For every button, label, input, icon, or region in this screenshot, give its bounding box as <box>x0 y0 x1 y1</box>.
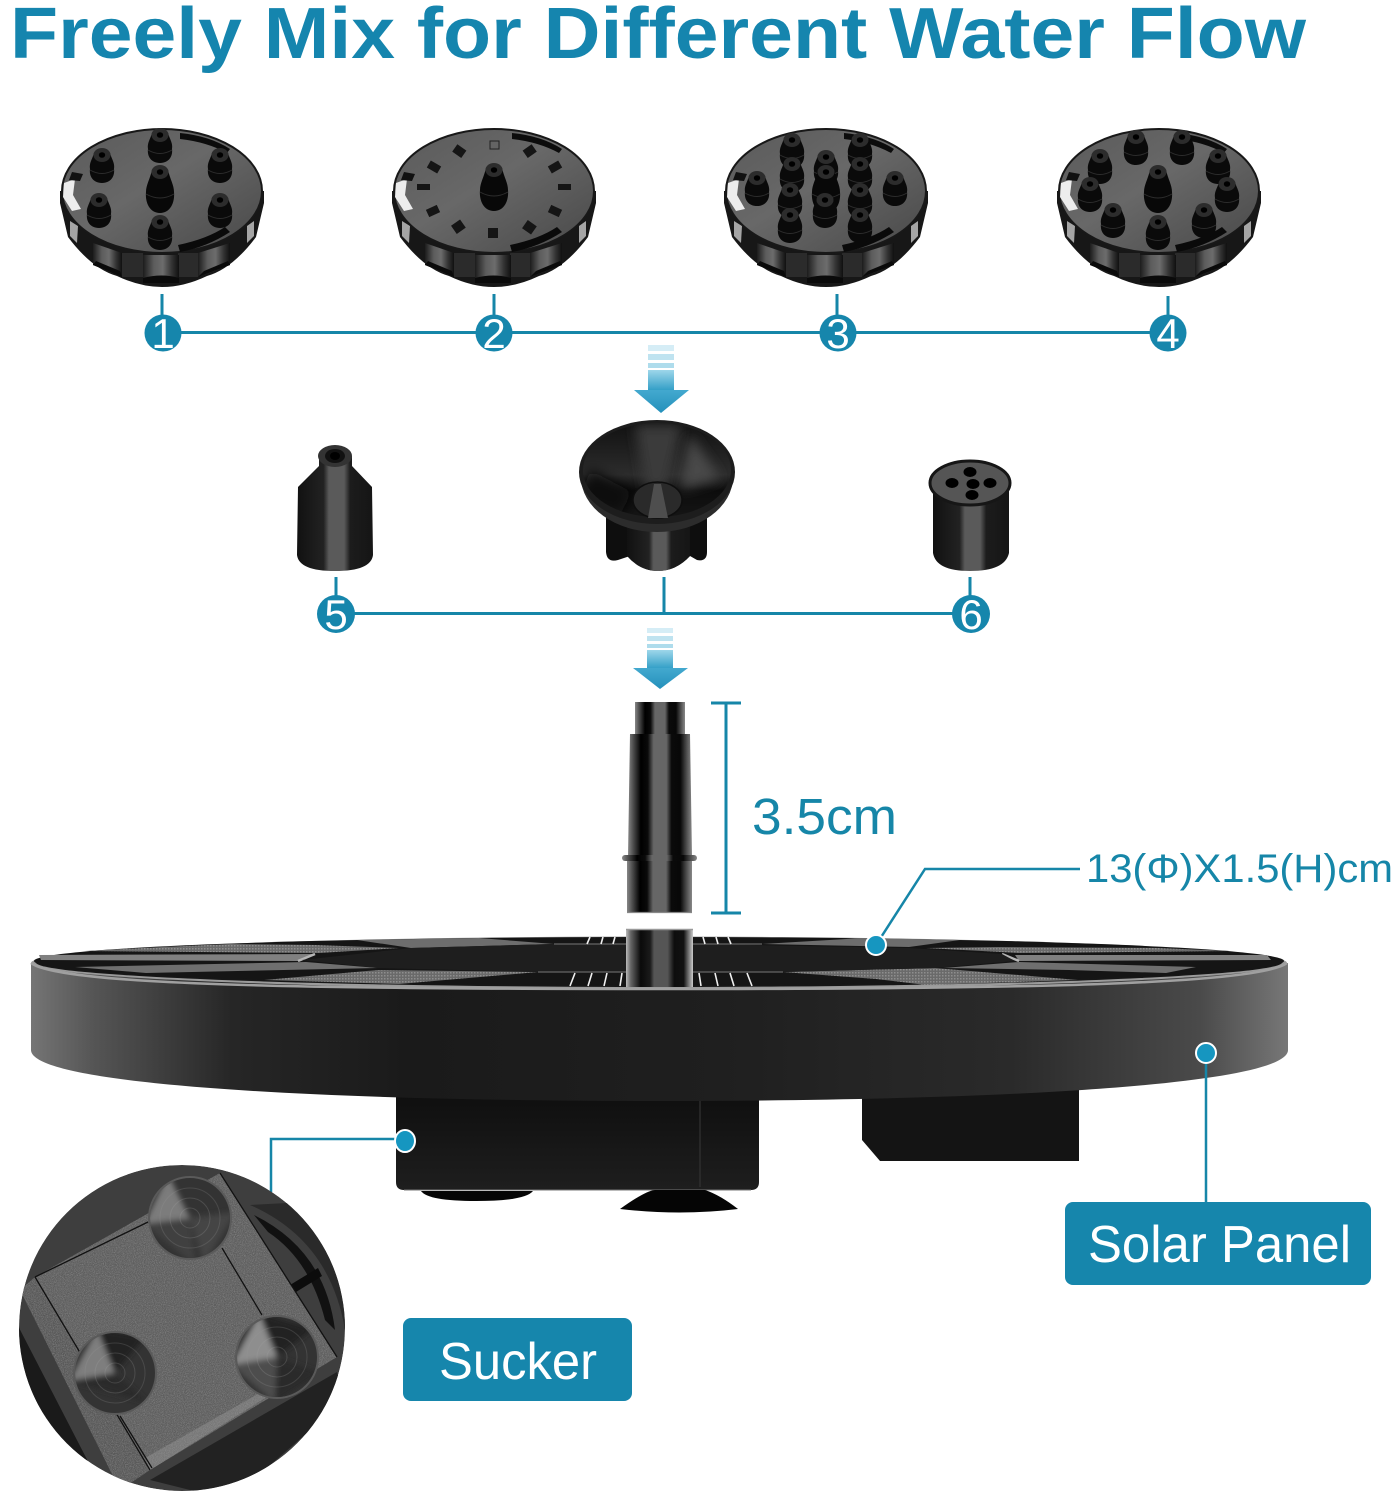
suction cup right <box>235 1315 319 1399</box>
connector row: numbered parts 5 and 6 <box>317 577 990 638</box>
solar fountain pump <box>31 702 1288 1212</box>
badge 6 <box>952 591 990 638</box>
nozzle disc 4 <box>1057 129 1261 287</box>
badge 2 <box>476 310 512 357</box>
nozzle disc 2 <box>392 129 596 287</box>
suction cup left <box>69 1329 156 1414</box>
badge 5: 5 <box>324 591 348 638</box>
badge 1 <box>144 310 182 357</box>
photo: underside suction cups <box>15 1165 345 1500</box>
disc side wall <box>31 963 1288 1101</box>
callout: solar panel <box>1065 1043 1371 1285</box>
solar panel label <box>1065 1202 1371 1285</box>
nozzle disc 3 <box>724 129 928 287</box>
textured pump base <box>35 1173 337 1470</box>
label: 3.5cm: 3.5cm <box>752 788 897 845</box>
label: disc size: 13(Φ)X1.5(H)cm <box>1086 847 1393 891</box>
suction feet <box>421 1190 738 1212</box>
nozzle disc 1 <box>60 128 264 287</box>
suction cup top <box>148 1176 232 1260</box>
badge 5 <box>317 591 355 638</box>
callout: disc dimensions <box>866 847 1393 955</box>
badge 6: 6 <box>959 591 983 638</box>
sucker label: Sucker <box>439 1333 597 1391</box>
arrow: down to adapter row <box>634 345 689 413</box>
panel: four fountain nozzle discs <box>60 128 1261 287</box>
solar panel label: Solar Panel <box>1088 1216 1351 1274</box>
connector row: numbered discs 1 to 4 <box>144 294 1186 357</box>
disc top face <box>31 936 1287 990</box>
pump box rear <box>862 1090 1079 1161</box>
badge 3: 3 <box>826 310 850 357</box>
badge 1: 1 <box>151 310 175 357</box>
dimension: tube height <box>711 703 897 913</box>
riser tube upper section <box>622 702 697 913</box>
callout: sucker leader line <box>271 1130 415 1192</box>
badge 2: 2 <box>482 310 506 357</box>
badge 4 <box>1150 310 1186 357</box>
badge 3 <box>820 310 856 357</box>
arrow: down to riser tube <box>633 628 688 689</box>
badge 4: 4 <box>1156 310 1180 357</box>
part: cone nozzle 5 <box>297 445 373 571</box>
pump box front <box>396 1090 759 1190</box>
part: multi-hole nozzle 6 <box>930 461 1010 571</box>
riser tube lower section <box>626 929 693 987</box>
part: suction cup adapter <box>579 420 735 571</box>
sucker label <box>403 1318 632 1401</box>
